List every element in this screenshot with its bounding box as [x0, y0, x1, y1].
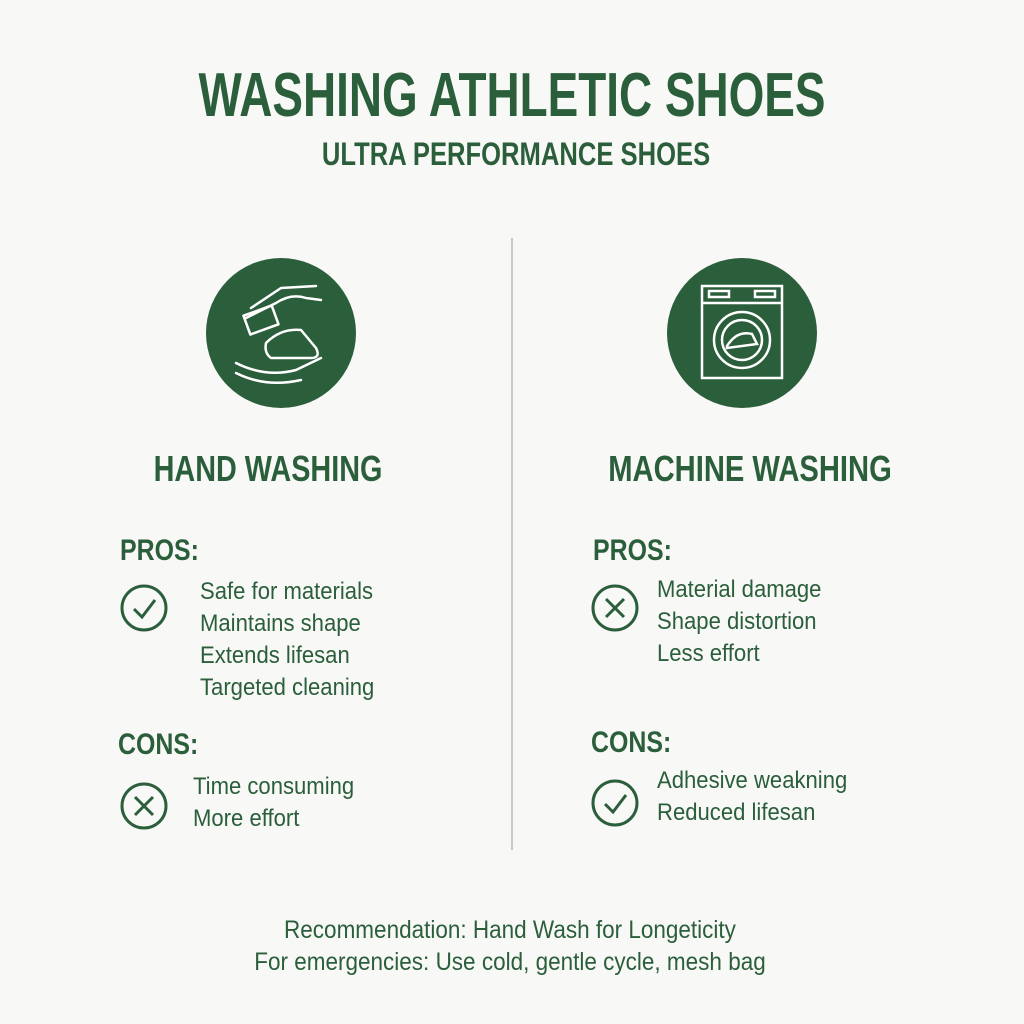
panel: machine pros: Material damage	[657, 576, 821, 603]
panel: machine cons: CONS:	[591, 726, 671, 759]
panel: machine pros: Shape distortion	[657, 608, 817, 635]
panel: hand cons: Time consuming	[193, 773, 354, 800]
panel: machine cons: Adhesive weakning	[657, 767, 847, 794]
panel: hand pros: Targeted cleaning	[200, 674, 374, 701]
footer recommendation	[254, 916, 766, 976]
panel: hand pros: Extends lifesan	[200, 642, 350, 669]
panel: machine pros	[592, 534, 821, 667]
panel: hand cons: CONS:	[118, 728, 198, 761]
panel: machine pros: PROS:	[593, 534, 672, 567]
footer recommendation: Recommendation: Hand Wash for Longeticity	[284, 916, 736, 944]
panel: hand pros: PROS:	[120, 534, 199, 567]
icon: washing machine	[667, 258, 817, 408]
panel: machine cons: Reduced lifesan	[657, 799, 815, 826]
title: WASHING ATHLETIC SHOES	[198, 61, 826, 130]
panel: hand pros: Maintains shape	[200, 610, 361, 637]
subtitle: ULTRA PERFORMANCE SHOES	[322, 136, 710, 172]
panel: hand pros: Safe for materials	[200, 578, 373, 605]
heading: hand washing: HAND WASHING	[154, 448, 382, 489]
panel: hand cons	[118, 728, 354, 832]
heading: machine washing: MACHINE WASHING	[608, 448, 892, 489]
panel: hand pros	[120, 534, 374, 701]
panel: machine cons	[591, 726, 847, 826]
panel: machine pros: Less effort	[657, 640, 760, 667]
panel: hand cons: More effort	[193, 805, 299, 832]
footer recommendation: For emergencies: Use cold, gentle cycle, mesh bag	[254, 948, 766, 976]
icon: hand washing	[206, 258, 356, 408]
